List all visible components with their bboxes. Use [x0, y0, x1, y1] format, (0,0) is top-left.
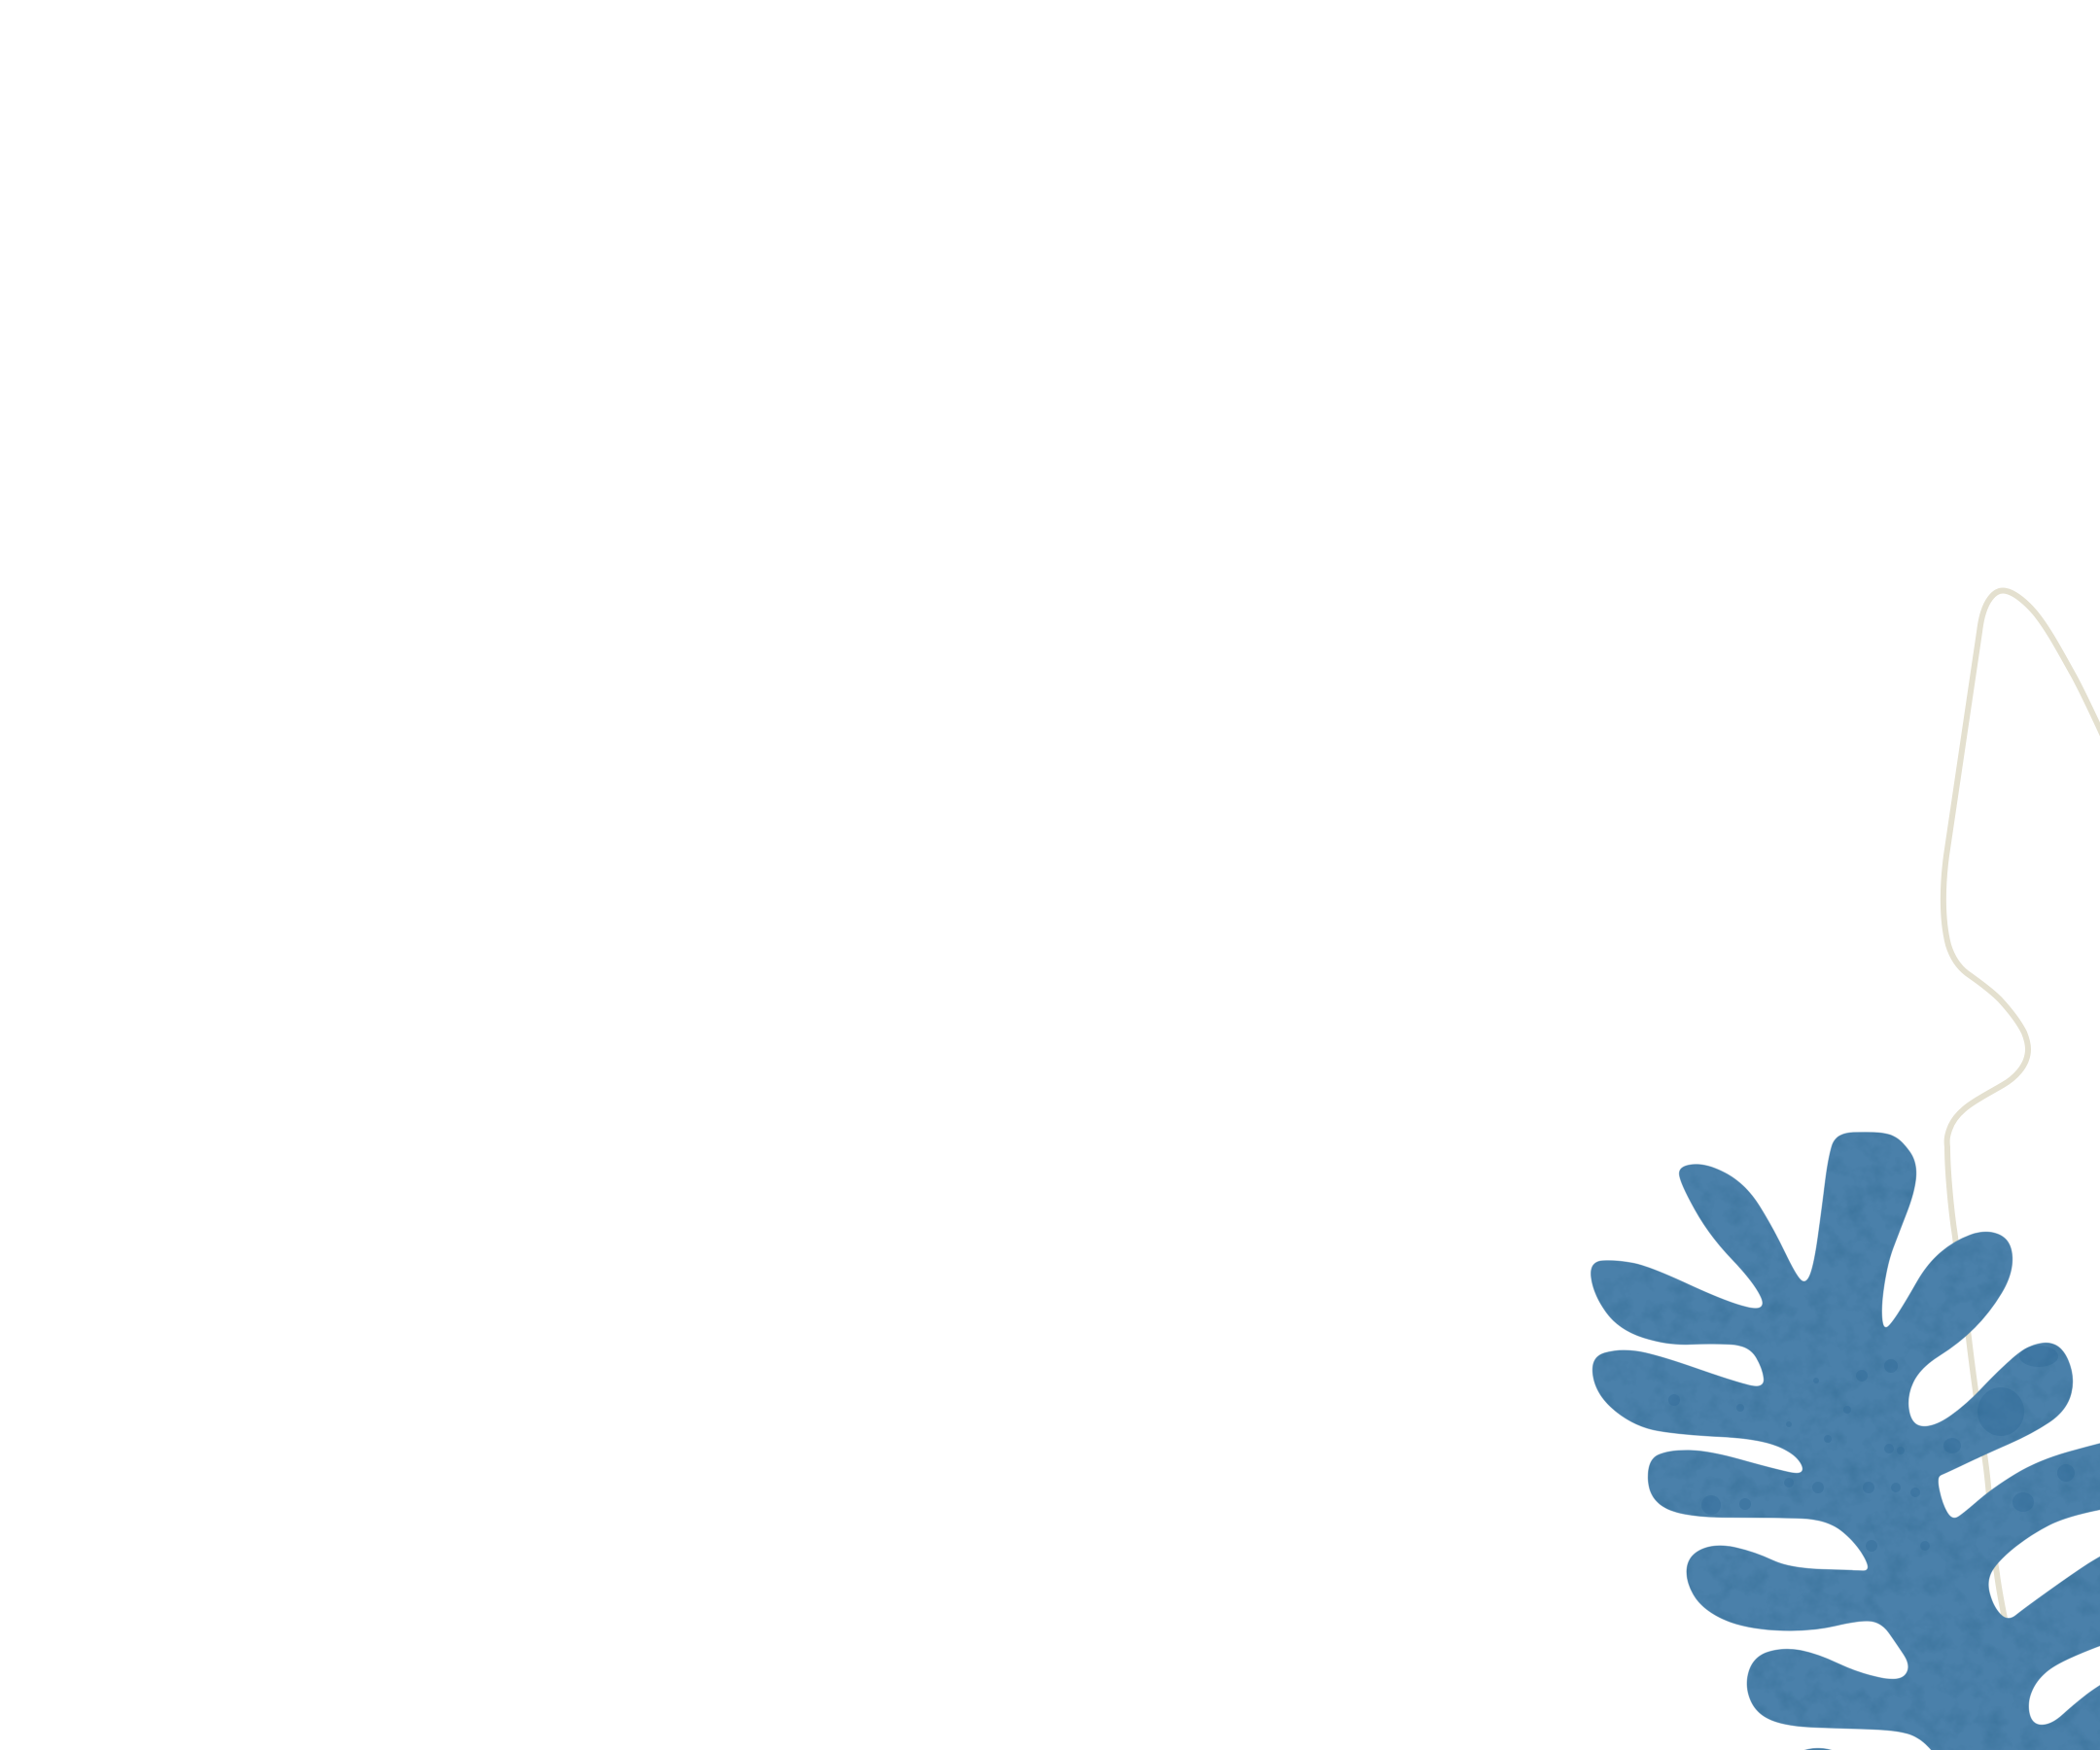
leaf silhouette — [1591, 1132, 2100, 1750]
dark blotches on leaf — [1668, 1346, 2075, 1552]
thin beige outline curve — [1943, 591, 2100, 1619]
blue paper cut-out leaf — [1591, 1132, 2100, 1750]
